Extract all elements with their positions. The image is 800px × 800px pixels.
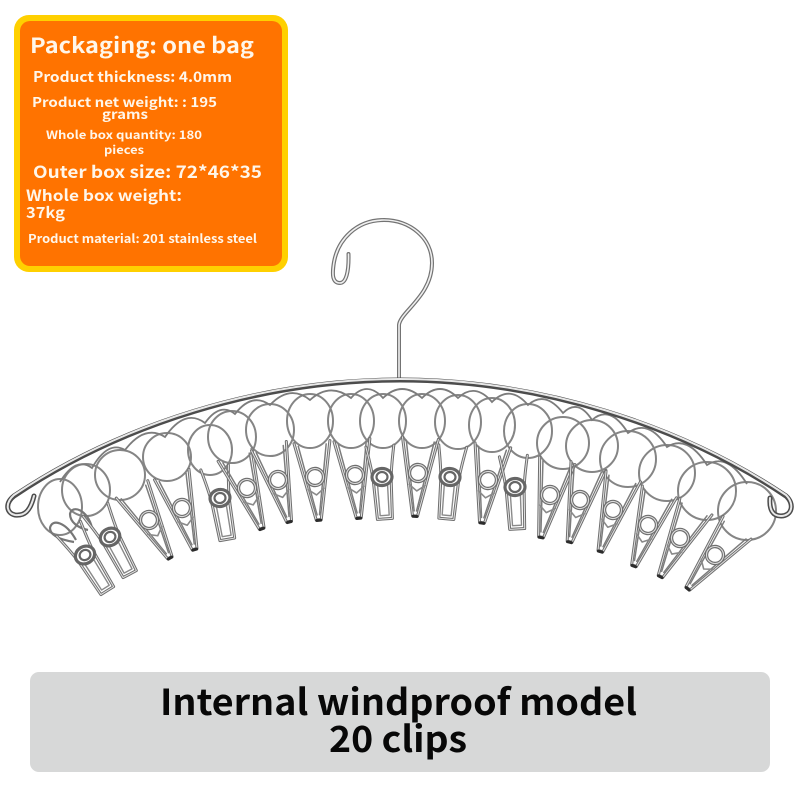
caption background <box>30 672 770 772</box>
clip 6 <box>218 449 279 535</box>
spec: box quantity: Whole box quantity: 180 <box>46 127 202 143</box>
illustration: stainless steel clip hanger <box>8 220 791 600</box>
clip 12 <box>432 445 467 520</box>
clip 3 <box>116 481 186 567</box>
panel border <box>14 15 288 272</box>
spec: thickness: Product thickness: 4.0mm <box>33 66 232 87</box>
clip 18 <box>617 486 676 572</box>
clip 1 wire loops <box>50 509 92 542</box>
clip 4 <box>155 469 212 555</box>
panel: product specifications <box>14 15 288 272</box>
spec: net weight: Product net weight: : 195 <box>32 91 217 111</box>
panel fill <box>20 21 282 266</box>
spec: box weight: Whole box weight: <box>26 184 182 206</box>
clip 15 <box>523 457 575 541</box>
spec: box weight value: 37kg <box>26 201 65 223</box>
spec: net weight unit: grams <box>102 103 148 123</box>
spec: box quantity unit: pieces <box>104 142 144 158</box>
curved hanger bar <box>8 379 791 516</box>
clip 1 <box>57 521 119 598</box>
clip 14 <box>499 455 531 530</box>
clip 20 <box>674 516 751 600</box>
caption bar <box>30 672 770 772</box>
caption line 2: 20 clips <box>329 711 467 763</box>
clip 10 <box>366 445 399 520</box>
clip 7 <box>252 442 307 527</box>
hanger hook <box>333 220 432 380</box>
caption line 1: Internal windproof model <box>160 674 637 726</box>
clip 5 <box>201 465 241 542</box>
clip 13 <box>464 443 511 526</box>
scalloped wire under the bar <box>60 389 747 484</box>
spec: material: Product material: 201 stainless steel <box>28 230 257 247</box>
clip 19 <box>644 499 712 585</box>
clip 9 <box>334 439 377 520</box>
clip 8 <box>294 441 337 522</box>
heading: packaging: Packaging: one bag <box>30 30 255 60</box>
clip 2 <box>83 503 142 581</box>
hanger rings <box>38 394 776 540</box>
clip 16 <box>552 462 606 547</box>
clip 17 <box>583 471 640 557</box>
clip 11 <box>397 437 438 518</box>
clothes clips <box>50 437 751 600</box>
spec: outer box size: Outer box size: 72*46*35 <box>33 158 262 183</box>
